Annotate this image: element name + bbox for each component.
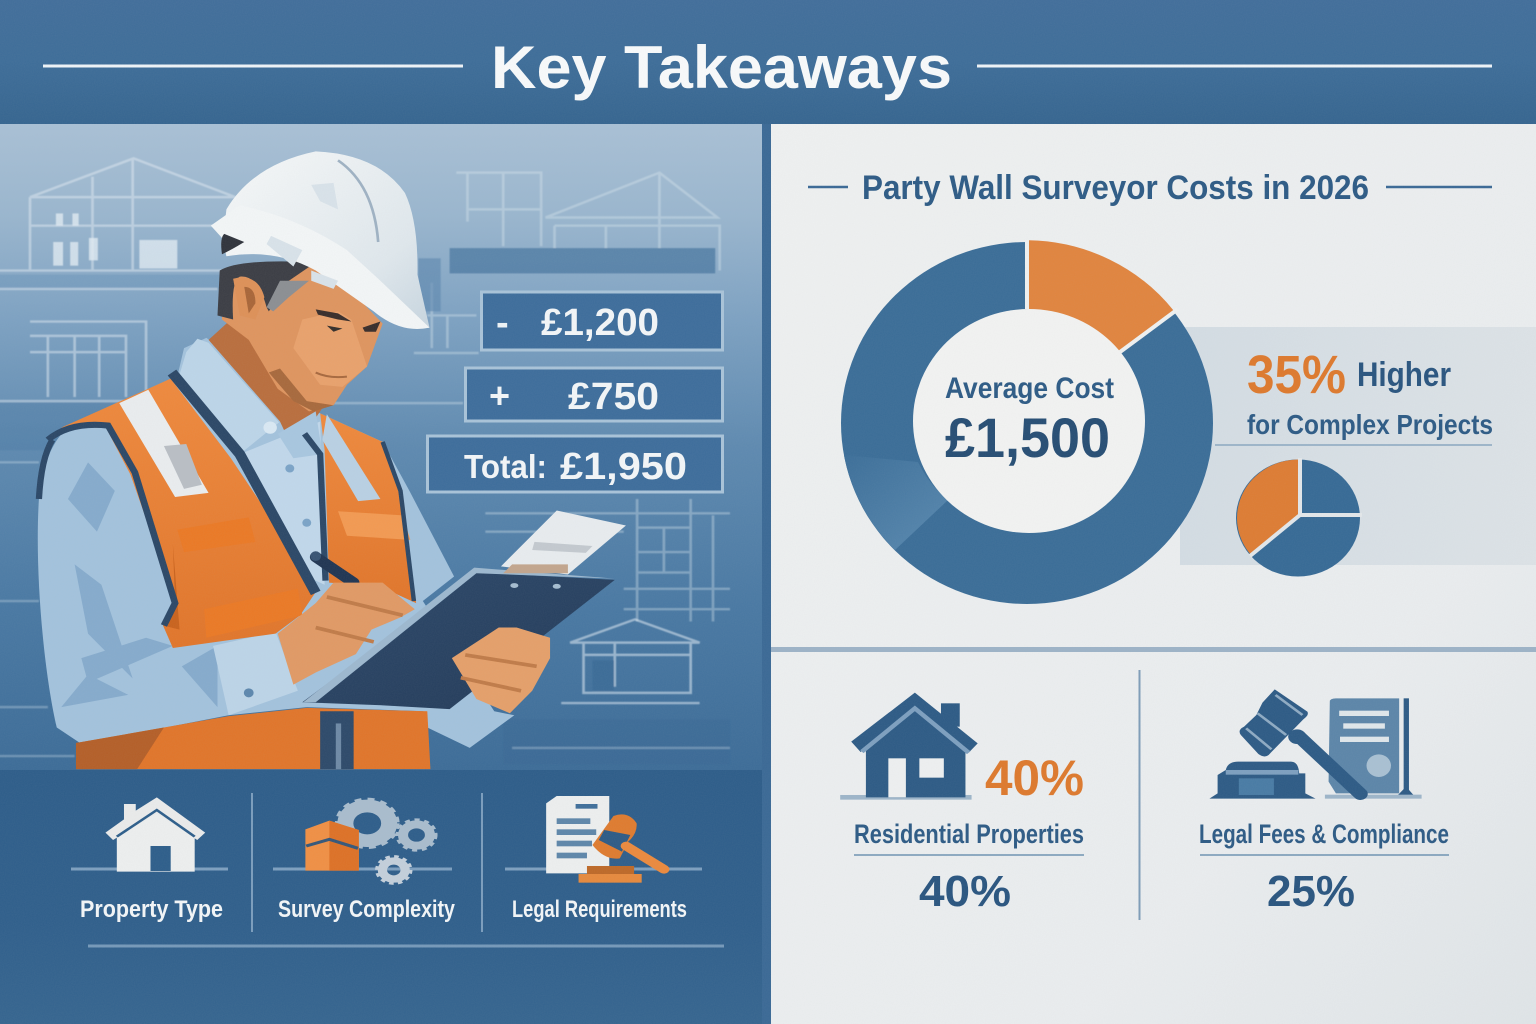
orange segment xyxy=(1029,241,1173,350)
box: plus 750: + xyxy=(489,375,510,416)
icon: white house xyxy=(105,797,205,872)
hair xyxy=(217,261,316,320)
shirt front xyxy=(240,422,325,585)
vertical stat divider xyxy=(1138,670,1140,920)
label: residential properties: Residential Properties xyxy=(854,819,1084,849)
blueprint building sketches xyxy=(0,158,730,764)
box: minus 1,200: £1,200 xyxy=(541,302,659,344)
panel: right background xyxy=(762,124,1536,1024)
value: 40%: 40% xyxy=(919,867,1011,916)
small pie chart xyxy=(1236,458,1362,576)
horizontal section divider xyxy=(771,647,1536,652)
label: property type: Property Type xyxy=(80,896,223,923)
callout: 35% higher: Higher xyxy=(1357,356,1451,394)
callout: 35% higher: for Complex Projects xyxy=(1247,409,1493,440)
box: plus 750 xyxy=(466,368,722,421)
donut chart: average cost xyxy=(841,240,1213,604)
vest xyxy=(61,379,318,648)
stat: legal fees and compliance xyxy=(1199,689,1449,916)
label: legal fees and compliance: Legal Fees & Compliance xyxy=(1199,819,1449,849)
cost boxes xyxy=(428,292,722,492)
clipboard xyxy=(302,572,615,709)
box: total 1,950: Total: xyxy=(464,448,547,485)
panel: left bottom factor strip xyxy=(0,770,762,1024)
label: legal requirements: Legal Requirements xyxy=(512,896,687,923)
worker illustration xyxy=(38,151,626,769)
vest dark edges and harness xyxy=(48,425,175,626)
header band xyxy=(0,0,1536,124)
neck xyxy=(209,311,327,450)
paper on clipboard xyxy=(501,510,626,575)
lower vest xyxy=(76,708,430,769)
pen xyxy=(316,557,354,583)
strip baseline rule xyxy=(88,944,724,948)
heading: party wall surveyor costs: Party Wall Surveyor Costs in 2026 xyxy=(862,169,1369,207)
writing hand xyxy=(278,583,415,685)
factor: survey complexity xyxy=(273,800,456,923)
separator xyxy=(251,793,253,932)
central vertical divider xyxy=(762,124,771,1024)
separator xyxy=(481,793,483,932)
value: 1,500: £1,500 xyxy=(945,406,1110,469)
icon: box and gears xyxy=(305,800,435,883)
callout band xyxy=(1180,327,1536,565)
shirt xyxy=(38,338,514,748)
title: Key Takeaways xyxy=(491,34,952,101)
callout: 35% higher xyxy=(1215,345,1493,445)
box: minus 1,200: - xyxy=(496,302,509,344)
icon: gavel and document xyxy=(1209,689,1422,799)
box: plus 750: £750 xyxy=(568,376,659,418)
panel: left illustration background xyxy=(0,124,762,770)
eyebrow and eye xyxy=(316,309,351,322)
icon: document and gavel xyxy=(546,796,664,883)
box: total 1,950 xyxy=(428,436,722,492)
lighter segment xyxy=(844,455,948,550)
box: minus 1,200 xyxy=(482,292,722,350)
vest reflective strips xyxy=(119,390,209,497)
holding hand xyxy=(452,628,550,713)
value: 25%: 25% xyxy=(1267,867,1355,916)
callout: 35% higher: 35% xyxy=(1247,345,1346,405)
ear xyxy=(233,277,264,320)
label: survey complexity: Survey Complexity xyxy=(278,896,456,923)
label: average cost: Average Cost xyxy=(945,372,1114,405)
box: total 1,950: £1,950 xyxy=(560,446,687,488)
helmet xyxy=(222,151,430,328)
factor: property type xyxy=(71,797,228,923)
head xyxy=(222,254,383,411)
factor: legal requirements xyxy=(505,796,702,923)
stat: residential properties xyxy=(840,693,1084,916)
collar xyxy=(180,339,279,454)
icon: blue house xyxy=(840,693,978,800)
value: orange 40%: 40% xyxy=(985,750,1084,806)
